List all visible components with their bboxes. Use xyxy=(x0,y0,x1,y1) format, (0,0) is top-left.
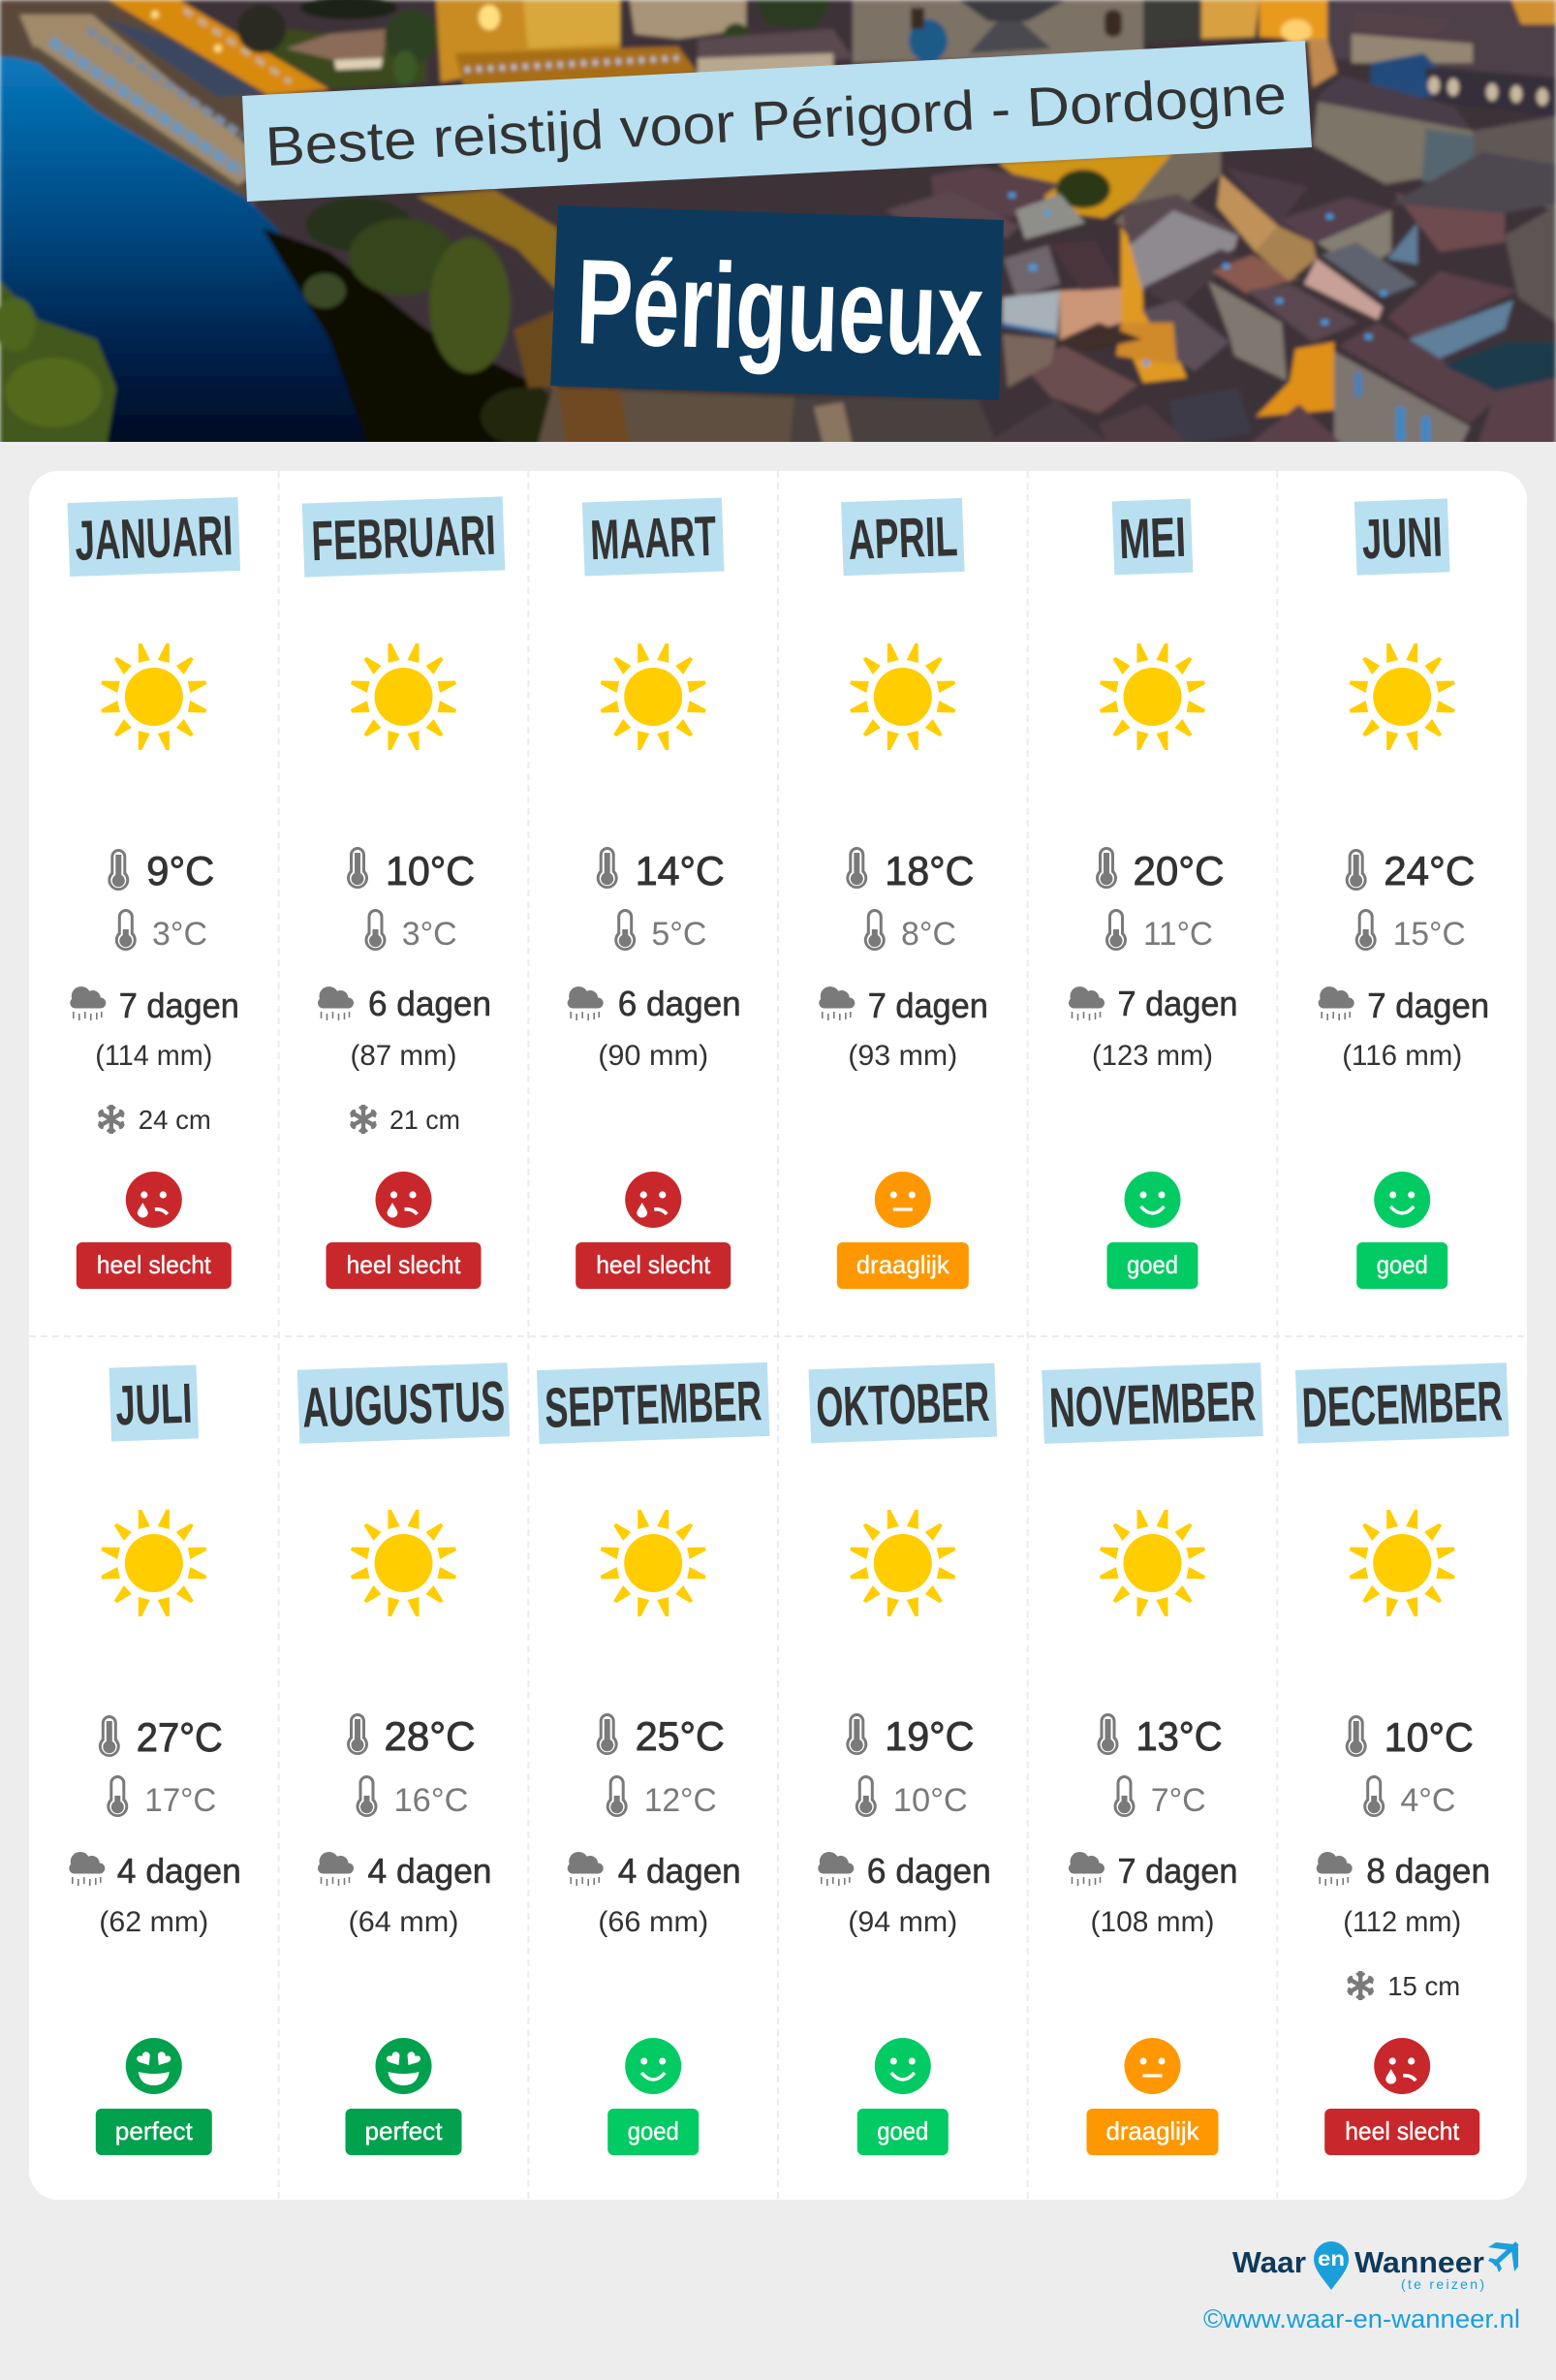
icon: sun xyxy=(1350,1510,1455,1616)
month heading: AUGUSTUS xyxy=(301,1369,506,1440)
month heading xyxy=(109,1364,199,1442)
month heading: OKTOBER xyxy=(815,1370,990,1439)
rating badge: heel slecht xyxy=(347,1250,461,1279)
maximum temperature xyxy=(99,1714,223,1760)
month: maart xyxy=(568,498,741,1289)
logo: Waar en Wanneer: (te reizen) xyxy=(1401,2276,1484,2292)
rating badge: goed xyxy=(1127,1250,1178,1279)
month heading: NOVEMBER xyxy=(1048,1369,1257,1440)
heading band: Beste reistijd xyxy=(242,41,1312,202)
month: mei xyxy=(1069,499,1238,1289)
rain days: 4 dagen xyxy=(368,1851,492,1891)
snowfall: 21 cm xyxy=(389,1105,460,1135)
logo: Waar en Wanneer xyxy=(1232,2241,1518,2292)
rating badge xyxy=(857,2109,949,2155)
header photo: Périgueux at dusk xyxy=(0,0,1556,448)
rating badge: heel slecht xyxy=(1345,2116,1460,2145)
rainfall: (93 mm) xyxy=(848,1040,957,1072)
maximum temperature: 14°C xyxy=(636,848,725,893)
minimum temperature xyxy=(1363,1775,1455,1819)
minimum temperature: 10°C xyxy=(893,1782,968,1819)
minimum temperature xyxy=(614,909,706,953)
logo: Waar en Wanneer: Wanneer xyxy=(1354,2245,1484,2279)
icon: sun xyxy=(101,643,206,750)
rain days: 8 dagen xyxy=(1366,1851,1490,1891)
heading band: Beste reistijd: Beste reistijd voor Périgord - Dordogne xyxy=(264,64,1288,178)
rating badge: goed xyxy=(628,2116,679,2145)
icon: sun xyxy=(351,643,456,750)
month heading xyxy=(1042,1362,1263,1444)
maximum temperature xyxy=(1096,847,1225,893)
rating badge xyxy=(77,1242,232,1289)
rating badge: heel slecht xyxy=(596,1250,711,1279)
month heading xyxy=(582,498,724,576)
rating badge xyxy=(1356,1242,1447,1289)
maximum temperature: 10°C xyxy=(386,848,475,893)
minimum temperature xyxy=(1114,1775,1206,1819)
month: juni xyxy=(1319,498,1489,1289)
rating badge xyxy=(345,2109,461,2155)
maximum temperature: 27°C xyxy=(137,1714,223,1760)
month heading xyxy=(841,498,965,576)
month: september xyxy=(537,1362,769,2155)
maximum temperature: 10°C xyxy=(1385,1714,1474,1760)
rain days xyxy=(819,986,988,1025)
month heading xyxy=(1112,499,1193,575)
maximum temperature: 20°C xyxy=(1134,848,1225,893)
month heading xyxy=(537,1362,769,1444)
rain days: 6 dagen xyxy=(867,1851,991,1891)
maximum temperature xyxy=(846,1713,974,1759)
maximum temperature xyxy=(597,847,725,893)
minimum temperature: 5°C xyxy=(651,916,706,953)
heading band: Périgueux xyxy=(550,205,1004,400)
rain days: 4 dagen xyxy=(117,1851,241,1891)
rainfall: (64 mm) xyxy=(349,1906,459,1938)
maximum temperature xyxy=(846,847,974,893)
rating badge xyxy=(837,1242,969,1289)
minimum temperature xyxy=(357,1775,469,1819)
minimum temperature xyxy=(107,1775,216,1819)
rain days xyxy=(1069,984,1238,1023)
rain days: 6 dagen xyxy=(368,984,491,1023)
rating badge xyxy=(1087,2109,1219,2155)
maximum temperature: 13°C xyxy=(1136,1713,1223,1759)
month heading: JANUARI xyxy=(74,504,233,573)
icon: sun xyxy=(601,1510,706,1616)
rain days xyxy=(1069,1851,1238,1891)
icon: good face xyxy=(1124,1172,1180,1228)
rain days: 6 dagen xyxy=(618,984,741,1023)
icon: sun xyxy=(101,1510,206,1616)
minimum temperature: 7°C xyxy=(1151,1782,1206,1819)
month: oktober xyxy=(809,1363,997,2155)
rating badge xyxy=(96,2109,212,2155)
minimum temperature xyxy=(1355,909,1466,953)
icon: sun xyxy=(850,1510,955,1616)
rating badge xyxy=(1106,1242,1198,1289)
month heading xyxy=(809,1363,997,1443)
rating badge: draaglijk xyxy=(1106,2116,1199,2145)
rainfall: (114 mm) xyxy=(95,1040,212,1072)
minimum temperature xyxy=(115,909,207,953)
heading band: Périgueux: Périgueux xyxy=(575,235,985,382)
minimum temperature: 16°C xyxy=(393,1782,469,1819)
rain days xyxy=(568,1851,741,1891)
rainfall: (123 mm) xyxy=(1092,1040,1213,1072)
rating badge: perfect xyxy=(115,2116,194,2145)
icon: very bad face xyxy=(376,1172,432,1228)
month: november xyxy=(1042,1362,1263,2155)
icon: sun xyxy=(850,643,955,750)
rating badge: heel slecht xyxy=(97,1250,212,1279)
rating badge xyxy=(326,1242,481,1289)
rainfall: (116 mm) xyxy=(1342,1040,1462,1072)
maximum temperature xyxy=(1346,1714,1474,1760)
rain days xyxy=(1319,986,1489,1025)
rating badge xyxy=(576,1242,731,1289)
icon: sun xyxy=(1100,1510,1205,1616)
icon: neutral face xyxy=(1124,2038,1180,2094)
rating badge: goed xyxy=(1377,1250,1428,1279)
month heading: MAART xyxy=(589,505,717,572)
rainfall: (62 mm) xyxy=(99,1906,208,1938)
icon: very bad face xyxy=(625,1172,681,1228)
rain days: 7 dagen xyxy=(119,986,239,1025)
month: januari xyxy=(68,497,240,1289)
maximum temperature: 28°C xyxy=(384,1713,475,1759)
month heading xyxy=(1354,498,1449,576)
rain days: 7 dagen xyxy=(1118,984,1238,1023)
maximum temperature: 9°C xyxy=(146,848,214,893)
snowfall: 15 cm xyxy=(1387,1971,1460,2001)
month: juli xyxy=(69,1364,241,2155)
maximum temperature xyxy=(597,1713,725,1759)
rainfall: (87 mm) xyxy=(351,1040,457,1072)
logo: Waar en Wanneer: en xyxy=(1318,2248,1345,2270)
month heading xyxy=(297,1362,510,1444)
rating badge xyxy=(1324,2109,1479,2155)
rainfall: (108 mm) xyxy=(1091,1906,1215,1938)
minimum temperature: 3°C xyxy=(152,916,207,953)
maximum temperature: 24°C xyxy=(1384,848,1475,893)
icon: sun xyxy=(1350,643,1455,750)
maximum temperature: 19°C xyxy=(885,1713,974,1759)
rain days: 4 dagen xyxy=(618,1851,741,1891)
month heading: SEPTEMBER xyxy=(544,1369,762,1440)
rating badge xyxy=(607,2109,699,2155)
icon: perfect face xyxy=(126,2038,182,2094)
maximum temperature xyxy=(108,848,214,893)
month heading xyxy=(68,497,240,577)
rainfall: (66 mm) xyxy=(598,1906,708,1938)
minimum temperature: 4°C xyxy=(1400,1782,1455,1819)
icon: very bad face xyxy=(126,1172,182,1228)
icon: neutral face xyxy=(875,1172,931,1228)
logo: Waar en Wanneer: Waar xyxy=(1232,2245,1306,2279)
snowfall xyxy=(99,1105,211,1135)
rating badge: perfect xyxy=(364,2116,443,2145)
month: augustus xyxy=(297,1362,510,2155)
month heading: APRIL xyxy=(847,505,958,572)
rain days: 7 dagen xyxy=(1118,1851,1238,1891)
snowfall xyxy=(351,1105,460,1135)
minimum temperature xyxy=(1105,909,1213,953)
month heading: JUNI xyxy=(1361,506,1444,571)
rain days xyxy=(318,984,491,1023)
icon: good face xyxy=(1374,1172,1430,1228)
rain days xyxy=(568,984,741,1023)
maximum temperature xyxy=(1097,1713,1223,1759)
rain days: 7 dagen xyxy=(1367,986,1489,1025)
snowfall: 24 cm xyxy=(139,1105,211,1135)
month heading xyxy=(302,496,505,578)
minimum temperature xyxy=(856,1775,968,1819)
panel: monthly climate card xyxy=(29,471,1527,2200)
icon: good face xyxy=(625,2038,681,2094)
icon: perfect face xyxy=(376,2038,432,2094)
month: december xyxy=(1295,1362,1509,2155)
month heading: MEI xyxy=(1118,506,1187,571)
minimum temperature: 8°C xyxy=(901,916,956,953)
website credit: ©www.waar-en-wanneer.nl xyxy=(1203,2304,1520,2333)
icon: sun xyxy=(351,1510,456,1616)
snowfall xyxy=(1348,1971,1460,2001)
maximum temperature xyxy=(347,847,475,893)
rainfall: (90 mm) xyxy=(598,1040,708,1072)
rainfall: (94 mm) xyxy=(848,1906,957,1938)
icon: good face xyxy=(875,2038,931,2094)
icon: very bad face xyxy=(1374,2038,1430,2094)
rating badge: goed xyxy=(877,2116,928,2145)
maximum temperature: 25°C xyxy=(636,1713,725,1759)
icon: sun xyxy=(601,643,706,750)
minimum temperature xyxy=(364,909,457,953)
minimum temperature: 15°C xyxy=(1393,916,1466,953)
month: april xyxy=(819,498,988,1289)
month: februari xyxy=(302,496,505,1289)
rain days xyxy=(70,986,239,1025)
icon: sun xyxy=(1100,643,1205,750)
month heading: FEBRUARI xyxy=(310,504,497,573)
minimum temperature: 3°C xyxy=(402,916,457,953)
minimum temperature xyxy=(607,1775,717,1819)
rating badge: draaglijk xyxy=(856,1250,950,1279)
minimum temperature: 17°C xyxy=(144,1782,216,1819)
month heading: JULI xyxy=(114,1372,193,1437)
maximum temperature: 18°C xyxy=(885,848,974,893)
minimum temperature: 12°C xyxy=(644,1782,717,1819)
rain days: 7 dagen xyxy=(868,986,988,1025)
minimum temperature: 11°C xyxy=(1143,916,1213,953)
rainfall: (112 mm) xyxy=(1343,1906,1461,1938)
minimum temperature xyxy=(864,909,956,953)
